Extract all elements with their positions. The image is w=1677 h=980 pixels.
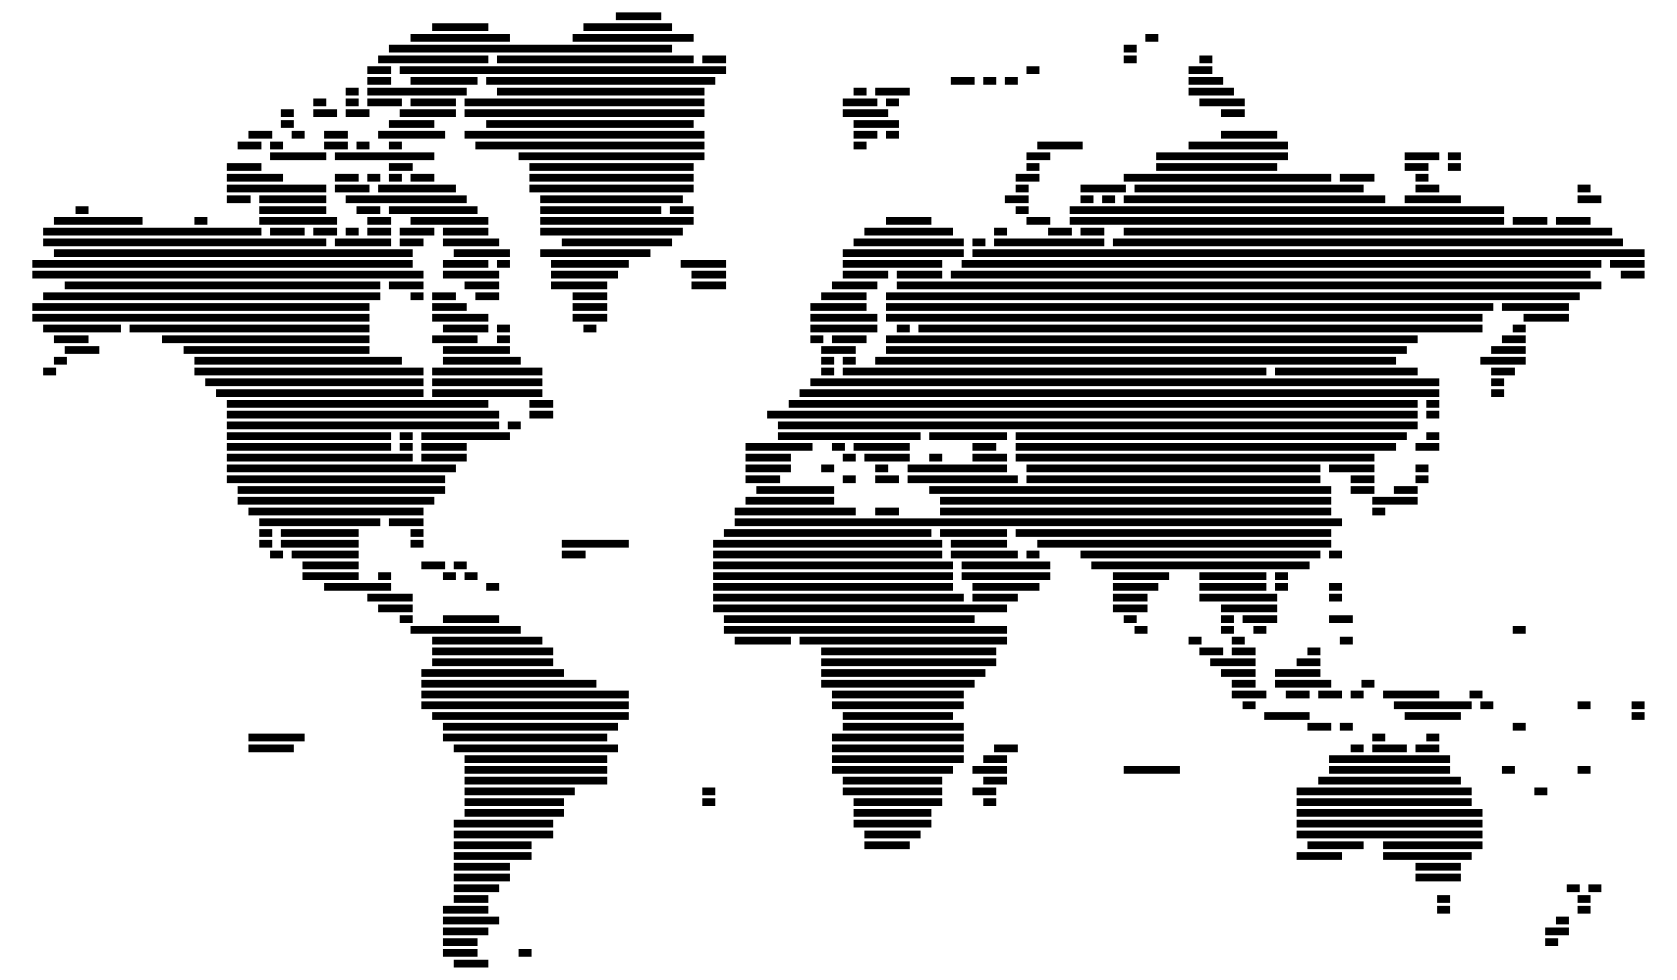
landmass: South America — [411, 619, 629, 964]
island: Tasmania — [1437, 899, 1450, 910]
landmass: Australia — [1297, 738, 1482, 878]
islands: Hawaii — [248, 738, 305, 748]
landmass: Southern Africa — [821, 662, 996, 845]
island: Madagascar — [972, 748, 1018, 802]
islands: Indian Ocean — [1124, 769, 1180, 771]
islands: Arctic Russia — [951, 38, 1245, 113]
islands: Svalbard region — [843, 92, 910, 145]
islands: Southeast Asia — [1210, 662, 1493, 727]
islands: New Zealand — [1545, 888, 1601, 942]
islands: South Atlantic — [702, 791, 715, 802]
landmass: Eurasia and North Africa — [713, 135, 1645, 651]
landmass: North America and Greenland — [32, 16, 726, 619]
islands: Pacific — [1502, 630, 1645, 791]
